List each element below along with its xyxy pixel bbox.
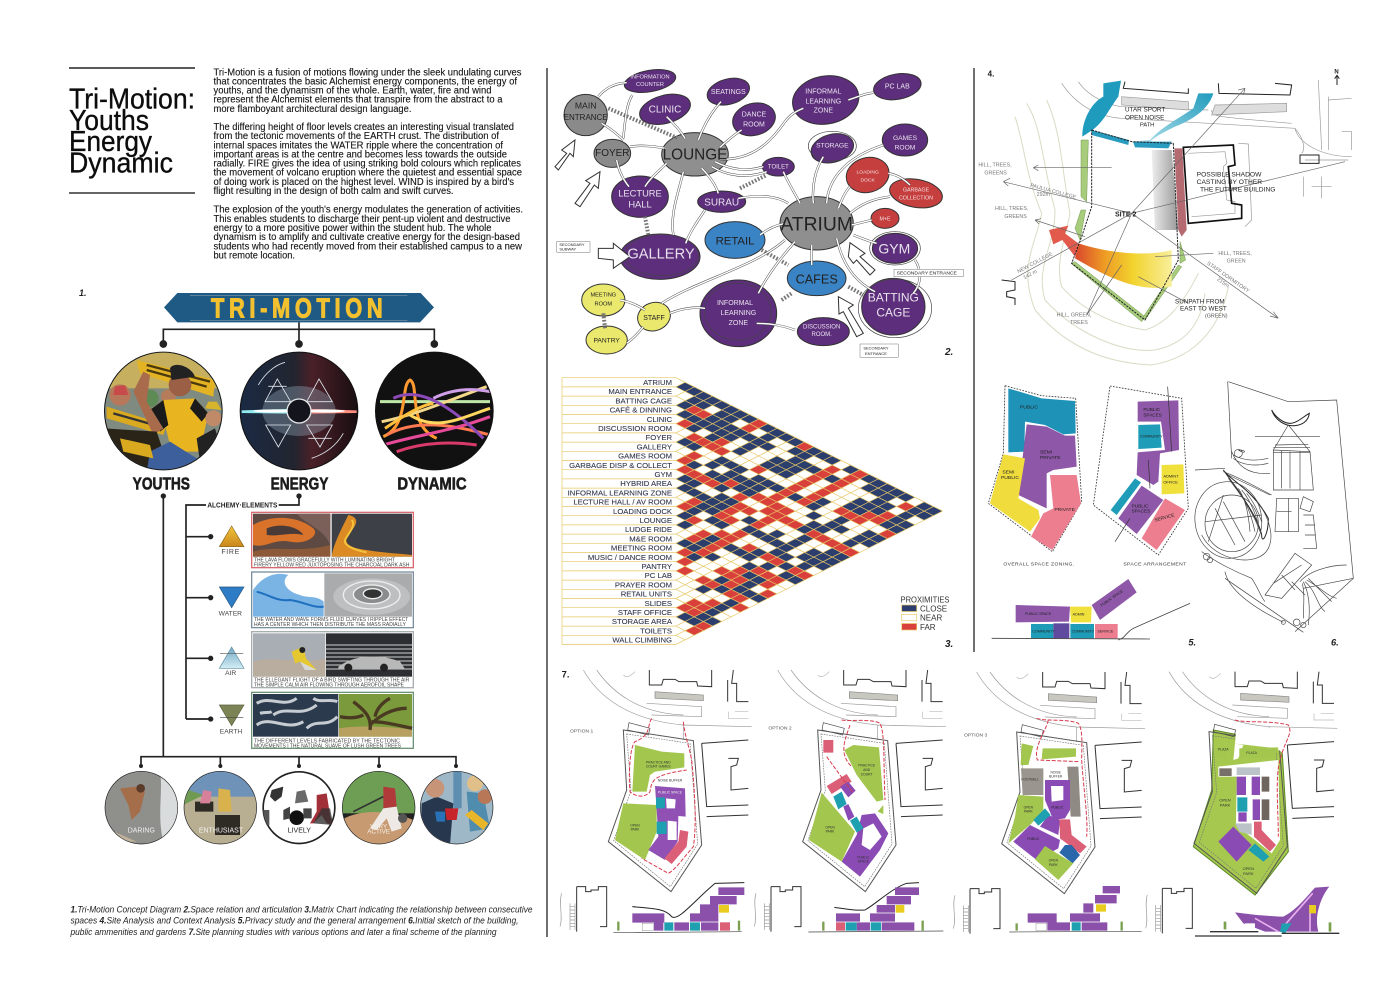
- bubble labels: COUNTER: [636, 82, 664, 88]
- bubble labels: INFORMAL: [717, 300, 753, 307]
- row labels: FOYER: [646, 433, 672, 442]
- bubbles: [564, 66, 945, 354]
- connector tree: [160, 322, 437, 347]
- dark bubble labels: STAFF: [643, 315, 665, 322]
- dark bubble labels: ROOM: [595, 302, 612, 308]
- space arrangement: PUBLIC: [1132, 503, 1149, 508]
- energy graphic: [240, 352, 360, 472]
- legend: FAR: [920, 623, 936, 632]
- zoning captions: OVERALL SPACE ZONING.: [1003, 562, 1075, 568]
- greenery notes: GREENS: [984, 170, 1007, 176]
- site annotations: POSSIBLE SHADOW: [1197, 172, 1262, 179]
- title block: Energy: [69, 126, 152, 158]
- space section: COMMUNITY: [1072, 629, 1095, 633]
- connector dots: [139, 493, 458, 768]
- entrance tags: ENTRANCE: [865, 351, 887, 356]
- space relation bubble diagram: [555, 66, 963, 357]
- description text: represent the Alchemist elements that transpire from the abstract to a: [214, 95, 503, 106]
- panel: water photos: THE WATER AND WAVE FORMS FLUID CURVES I RIPPLE EFFECT: [254, 617, 409, 623]
- circle: lively: [262, 771, 336, 844]
- circle: daring: DARING: [128, 827, 155, 834]
- option 2 plan: PRACTICE: [858, 764, 876, 768]
- description text: of doing work is placed on the highest level. WIND is inspired by a bird's: [214, 177, 514, 188]
- contour lines: [1015, 100, 1228, 365]
- icon: air: [219, 647, 244, 677]
- overall space zoning: SEMI: [1040, 449, 1052, 455]
- space arrangement: [1093, 386, 1188, 555]
- icon: water: WATER: [219, 611, 242, 618]
- row labels: MEETING ROOM: [611, 544, 672, 553]
- option 3 plan: PUBLIC: [1027, 837, 1040, 841]
- option 2 plan: SPACE: [858, 860, 870, 864]
- entrance tags: SECONDARY ENTRANCE: [897, 271, 958, 277]
- option 1 plan: PUBLIC SPACE: [658, 790, 683, 794]
- panel: air photos: [252, 632, 413, 689]
- bubble labels: COLLECTION: [899, 195, 933, 201]
- bubble labels: DISCUSSION: [803, 324, 840, 330]
- bubble labels: CAGE: [876, 306, 910, 320]
- panel: fire photos: FIRERY YELLOW RED JUXTOPOSING THE CHARCOAL DARK ASH: [254, 562, 410, 568]
- row labels: LECTURE HALL / AV ROOM: [573, 498, 672, 507]
- option 3 plan: PARK: [1024, 810, 1034, 814]
- option 3 plan: [953, 672, 1145, 934]
- description text: from the tectonic movements of the EARTH crust. The distribution of: [214, 131, 499, 142]
- option 4 plan: PLAZA: [1246, 751, 1258, 755]
- panel: air photos: THE SIMPLE CALM AIR FLOWING THROUGH AEROFOIL SHAPE: [254, 683, 405, 689]
- option 2 plan: PARK: [826, 830, 835, 834]
- panel: earth photos: [252, 692, 413, 749]
- row labels: TOILETS: [640, 626, 672, 635]
- option 3 plan: OPTION 3: [964, 733, 987, 739]
- legend: [900, 596, 950, 632]
- figure number 3: 3.: [945, 639, 953, 650]
- figure number 1: 1.: [79, 288, 87, 298]
- title block: Dynamic: [69, 148, 173, 180]
- option 4 plan: OPEN: [1243, 866, 1254, 871]
- option 1 plan: PARK: [631, 828, 640, 832]
- bubble labels: GALLERY: [627, 246, 695, 262]
- figure number 7: 7.: [562, 669, 569, 679]
- bubble labels: BATTING: [868, 291, 919, 305]
- description text: that concentrates the basic Alchemist energy components, the energy of: [214, 76, 517, 87]
- site analysis sketch: [978, 69, 1352, 365]
- greenery notes: NEW COLLEGE: [1016, 251, 1054, 275]
- entrance tags: SECONDARY: [559, 242, 585, 247]
- circle: very active: [342, 770, 417, 845]
- bubble labels: GARBAGE: [903, 188, 930, 194]
- overall space zoning: PUBLIC: [1001, 475, 1019, 481]
- zoning captions: SPACE ARRANGEMENT: [1123, 562, 1187, 568]
- option 3 plan: OPEN: [1024, 805, 1034, 809]
- dark bubble labels: LOUNGE: [663, 146, 727, 163]
- greenery notes: GREENS: [1004, 214, 1027, 220]
- option 1 plan: PRACTICE AND: [646, 760, 671, 764]
- description text: The differing height of floor levels creates an interesting visual translated: [214, 122, 514, 133]
- bubble labels: LOADING: [856, 169, 879, 175]
- site boundary: [1072, 130, 1178, 320]
- site planning options: [560, 669, 946, 933]
- circle: enthusiast: [183, 770, 258, 845]
- title block: Tri-Motion:: [69, 84, 195, 116]
- panel: fire photos: THE LAVA FLOWS GRACEFULLY WITH LUMINATING BRIGHT: [254, 557, 396, 563]
- shadow zone: [1152, 148, 1187, 237]
- row labels: DISCUSSION ROOM: [598, 424, 672, 433]
- bubble labels: DANCE: [742, 112, 767, 119]
- option 4 plan: [1146, 672, 1337, 933]
- entrance tags: [557, 242, 963, 357]
- bubble labels: SEATINGS: [711, 89, 746, 96]
- option 2 plan: OPTION 2: [768, 725, 792, 731]
- icon: earth: [219, 705, 244, 736]
- description text: more flamboyant architectural design language.: [214, 104, 412, 115]
- adjacent building: [1183, 145, 1242, 223]
- row labels: GARBAGE DISP & COLLECT: [569, 461, 672, 470]
- bubble labels: ZONE: [729, 320, 748, 327]
- panel: air photos: THE ELLEGANT FLIGHT OF A BIRD SWIFTING THROUGH THE AIR: [254, 678, 410, 684]
- description text: but remote location.: [214, 250, 295, 261]
- space arrangement: ADMINT: [1163, 474, 1179, 479]
- site annotations: UTAR SPORT: [1125, 107, 1165, 114]
- overall space zoning: PUBLIC: [1020, 404, 1038, 410]
- dark bubble labels: MAIN: [575, 100, 596, 110]
- site planning options 3 and 4: [953, 672, 1339, 936]
- bubble labels: SURAU: [704, 197, 739, 208]
- site annotations: 4.: [988, 70, 994, 79]
- bubble labels: HALL: [628, 200, 652, 210]
- space section: SERVICE: [1097, 629, 1114, 633]
- title block: [69, 68, 195, 193]
- bubble labels: LECTURE: [618, 189, 662, 199]
- dotted links: [603, 108, 863, 328]
- row labels: CLINIC: [647, 415, 672, 424]
- bubble labels: INFORMATION: [630, 74, 670, 80]
- space section: [992, 579, 1190, 640]
- zoning captions: [1003, 562, 1187, 568]
- site annotations: SUNPATH FROM: [1175, 298, 1225, 305]
- panel: earth photos: MOVEMENTS I THE NATURAL SUAVE OF LUSH GREEN TREES: [254, 743, 402, 749]
- greenery notes: TREES: [1070, 320, 1088, 326]
- row labels: GALLERY: [637, 442, 672, 451]
- row labels: INFORMAL LEARNING ZONE: [568, 488, 672, 497]
- option 3 plan: PUBLIC: [1051, 805, 1064, 809]
- bubble labels: DOCK: [860, 178, 876, 184]
- circle: lively: LIVELY: [288, 827, 311, 834]
- bubble labels: CLINIC: [649, 105, 681, 116]
- figure numbers 5 and 6: 6.: [1331, 638, 1339, 648]
- description text: youths, and the dynamism of the whole. Earth, water, fire and wind: [214, 86, 492, 97]
- circle: cheerful people: [420, 771, 493, 845]
- overall space zoning: SEMI: [1002, 469, 1015, 475]
- site annotations: OPEN NOISE: [1125, 114, 1164, 121]
- space arrangement: SPACES: [1143, 412, 1162, 417]
- category labels: DYNAMIC: [397, 473, 467, 493]
- circle: daring: [103, 770, 180, 847]
- space section: PUBLIC SPACE: [1025, 612, 1052, 616]
- row labels: SLIDES: [645, 599, 672, 608]
- dark bubble labels: FOYER: [595, 148, 630, 159]
- dark bubble labels: [564, 100, 853, 345]
- matrix chart: [562, 378, 950, 645]
- bubble labels: M+E: [879, 217, 891, 223]
- bubble labels: GAMES: [893, 135, 918, 142]
- row labels: MUSIC / DANCE ROOM: [588, 553, 672, 562]
- space arrangement: COMMUNITY: [1140, 435, 1163, 439]
- entrance tags: SUBWAY: [559, 247, 576, 252]
- panel: earth photos: THE DIFFERENT LEVELS FABRICATED BY THE TECTONIC: [254, 738, 400, 744]
- option 1 plan: OPEN: [630, 824, 640, 828]
- circle: enthusiast: ENTHUSIAST: [199, 827, 244, 834]
- row labels: LUDGE RIDE: [625, 525, 672, 534]
- icon: air: AIR: [225, 670, 236, 677]
- alchemy heading: ALCHEMY·ELEMENTS: [207, 503, 278, 510]
- row labels: HYBRID AREA: [620, 479, 673, 488]
- greenery notes: STAFF DORMITORY: [1206, 261, 1251, 295]
- greenery notes: [978, 163, 1252, 326]
- icon: water: [219, 587, 244, 618]
- row labels: CAFÉ & DINNING: [610, 406, 672, 415]
- bubble labels: GYM: [878, 240, 910, 256]
- space section: PUBLIC SPACE: [1100, 589, 1124, 607]
- panel dividers: [547, 68, 974, 937]
- description text: The explosion of the youth's energy modulates the generation of activities.: [214, 205, 523, 216]
- description text: internal spaces imitates the WATER ripple where the concentration of: [214, 140, 503, 151]
- description text: Tri-Motion is a fusion of motions flowing under the sleek undulating curves: [214, 67, 522, 78]
- figure number 2: 2.: [944, 347, 953, 358]
- space section: ADMIN: [1073, 613, 1085, 617]
- bubble labels: ZONE: [814, 108, 833, 115]
- site arrows: [1003, 88, 1345, 318]
- dark bubble labels: CAFES: [796, 272, 838, 286]
- circle: very active: VERY: [370, 823, 388, 830]
- option 2 section: [808, 883, 943, 932]
- dark bubble labels: ATRIUM: [780, 215, 853, 236]
- circle: very active: ACTIVE: [367, 829, 390, 836]
- connector arrows: [598, 83, 920, 343]
- option 2 plan: [754, 670, 946, 932]
- row labels: MAIN ENTRANCE: [608, 387, 672, 396]
- row labels: PC LAB: [645, 571, 672, 580]
- bubble labels: STORAGE: [816, 142, 849, 149]
- description text: energy to a more positive power within the student hub. The whole: [214, 223, 492, 234]
- row labels: LOUNGE: [640, 516, 672, 525]
- option 4 plan: OPEN: [1219, 798, 1231, 803]
- north arrow: [1334, 69, 1339, 85]
- north arrow: N: [1334, 69, 1339, 75]
- bubble labels: LEARNING: [805, 98, 841, 105]
- space arrangement: SPACES: [1132, 509, 1150, 514]
- description text: [214, 67, 523, 261]
- greenery notes: GREEN: [1227, 258, 1246, 264]
- sun path: [1049, 226, 1172, 288]
- caption text: public ammenities and gardens 7.Site planning studies with various options and later a final scheme of the planning: [70, 927, 497, 937]
- legend: NEAR: [920, 614, 942, 622]
- row labels: [568, 378, 673, 645]
- overall space zoning: PRIVATE: [1054, 507, 1076, 513]
- caption text: [70, 904, 533, 937]
- row labels: STORAGE AREA: [612, 617, 673, 626]
- bubble labels: [618, 74, 933, 338]
- panel: fire photos: [252, 512, 413, 568]
- option 3 plan: FOOTBALL: [1021, 778, 1039, 782]
- alchemy elements tree: [103, 493, 493, 847]
- row labels: M&E ROOM: [629, 534, 672, 543]
- dark bubble labels: MEETING: [590, 293, 616, 299]
- description text: important areas is at the centre and becomes less towards the outside: [214, 149, 507, 160]
- figure numbers 5 and 6: 5.: [1188, 638, 1196, 648]
- option 2 plan: OPEN: [825, 825, 835, 829]
- category labels: ENERGY: [271, 473, 329, 493]
- site annotations: EAST TO WEST: [1180, 306, 1227, 313]
- option 3 plan: NOISE: [1050, 770, 1062, 774]
- row labels: RETAIL UNITS: [621, 590, 672, 599]
- option 1 plan: OPTION 1: [570, 729, 593, 735]
- green edges: [1071, 140, 1186, 322]
- site annotations: [988, 70, 1275, 319]
- row labels: STAFF OFFICE: [618, 608, 672, 617]
- legend: CLOSE: [920, 604, 947, 614]
- row labels: PRAYER ROOM: [615, 580, 672, 589]
- legend: PROXIMITIES: [900, 596, 950, 604]
- description text: students who had recently moved from their established campus to a new: [214, 241, 523, 252]
- dark bubble labels: RETAIL: [716, 235, 754, 247]
- description text: flight resulting in the design of both calm and swift curves.: [214, 186, 454, 197]
- option 3 plan: PARK: [1049, 863, 1059, 867]
- option 2 plan: AND: [863, 768, 871, 772]
- concept diagram header: [103, 293, 494, 493]
- category labels: YOUTHS: [133, 473, 190, 493]
- greenery notes: HILL, GREEN,: [1057, 313, 1091, 319]
- site annotations: SITE 2: [1115, 212, 1136, 219]
- icon: fire: [219, 526, 244, 556]
- option 1 plan: COURT GAMES: [646, 764, 671, 768]
- row labels: WALL CLIMBING: [612, 636, 672, 645]
- greenery notes: HILL, TREES,: [1218, 251, 1252, 257]
- row labels: GAMES ROOM: [618, 452, 672, 461]
- row labels: ATRIUM: [643, 378, 672, 387]
- option 4 plan: PARK: [1243, 871, 1254, 876]
- option 1 section: [613, 883, 744, 933]
- figure numbers 5 and 6: [1188, 638, 1339, 648]
- option 4 section: [1195, 887, 1339, 936]
- caption text: 1.Tri-Motion Concept Diagram 2.Space relation and articulation 3.Matrix Chart indicating the relationship between consecutive: [70, 904, 532, 914]
- row labels: BATTING CAGE: [615, 396, 672, 405]
- initial sketch: [1190, 382, 1353, 632]
- site annotations: THE FUTURE BUILDING: [1200, 187, 1275, 194]
- bubble labels: INFORMAL: [805, 88, 841, 95]
- space section: COMMUNITY: [1032, 629, 1055, 633]
- greenery notes: 142 m: [1022, 269, 1039, 281]
- youths photo: [103, 352, 223, 472]
- neighbour building outlines: [1002, 82, 1319, 305]
- overall space zoning: [988, 386, 1082, 552]
- matrix cells: [676, 378, 943, 644]
- banner: TRI-MOTION: [211, 294, 383, 324]
- site annotations: (GREEN): [1205, 313, 1228, 319]
- bubble labels: PC LAB: [885, 83, 910, 90]
- option 1 plan: NOISE BUFFER: [658, 779, 683, 783]
- greenery notes: 215m: [1216, 277, 1230, 290]
- panel: water photos: [252, 572, 413, 628]
- entrance tags: SECONDARY: [863, 345, 889, 350]
- road lines: [1062, 80, 1352, 227]
- description text: This enables students to discharge their pent-up violent and destructive: [214, 214, 511, 225]
- row labels: LOADING DOCK: [613, 507, 673, 516]
- privacy study sketches: [988, 382, 1353, 648]
- option 1 plan: [560, 670, 752, 932]
- teal flow strips: [1082, 81, 1213, 148]
- dark bubble labels: ENTRANCE: [564, 113, 608, 122]
- icon: fire: FIRE: [221, 549, 240, 556]
- bubble labels: ROOM.: [812, 332, 832, 338]
- description text: the movement of volcano eruption where the quietest and essential space: [214, 168, 522, 179]
- option 2 plan: PUBLIC: [857, 855, 870, 859]
- dynamic light trails: [375, 352, 494, 470]
- bubble labels: TOILET: [768, 165, 789, 171]
- tree connectors: [141, 496, 456, 766]
- caption text: spaces 4.Site Analysis and Context Analysis 5.Privacy study and the general arrangement 6.Initial sketch of the building,: [70, 916, 518, 926]
- option 3 plan: BUFFER: [1049, 774, 1063, 778]
- greenery notes: PAULUA COLLEGE: [1029, 183, 1077, 201]
- greenery notes: HILL, TREES,: [995, 206, 1028, 212]
- row labels: GYM: [654, 470, 672, 479]
- bubble labels: LEARNING: [720, 310, 756, 317]
- greenery notes: HILL, TREES,: [978, 163, 1012, 169]
- option 3 section: [1009, 886, 1142, 932]
- option 2 plan: COURT: [861, 772, 873, 776]
- bubble labels: ROOM: [895, 144, 915, 151]
- option 3 plan: OPEN: [1049, 859, 1059, 863]
- entry arrows: [555, 140, 875, 337]
- greenery notes: 292m: [1037, 192, 1051, 198]
- bubble labels: ROOM: [743, 122, 765, 129]
- description text: dynamism is to amplify and cultivate creative energy for the design-based: [214, 232, 520, 243]
- site annotations: PATH: [1140, 123, 1154, 129]
- space arrangement: PUBLIC: [1143, 407, 1161, 412]
- option 4 plan: PLAZA: [1218, 748, 1229, 752]
- option 4 plan: PARK: [1220, 803, 1231, 808]
- title block: Youths: [69, 105, 149, 137]
- site annotations: CASTING BY OTHER: [1197, 179, 1262, 186]
- overall space zoning: PRIVATE: [1040, 455, 1061, 461]
- icon: earth: EARTH: [220, 729, 242, 736]
- description text: radially. FIRE gives the idea of using striking bold colours which replicates: [214, 159, 521, 170]
- space arrangement: OFFICE: [1163, 479, 1178, 484]
- row labels: PANTRY: [642, 562, 672, 571]
- panel: water photos: HAS A CENTER WHICH THEN DISTRIBUTE THE MASS RADIALLY: [254, 622, 407, 628]
- banner: [164, 293, 434, 324]
- space arrangement: SERVICE: [1154, 513, 1175, 523]
- dark bubble labels: PANTRY: [593, 338, 620, 345]
- row stripes: [562, 378, 676, 644]
- sketch outlines: [625, 131, 932, 340]
- category labels: [133, 473, 467, 493]
